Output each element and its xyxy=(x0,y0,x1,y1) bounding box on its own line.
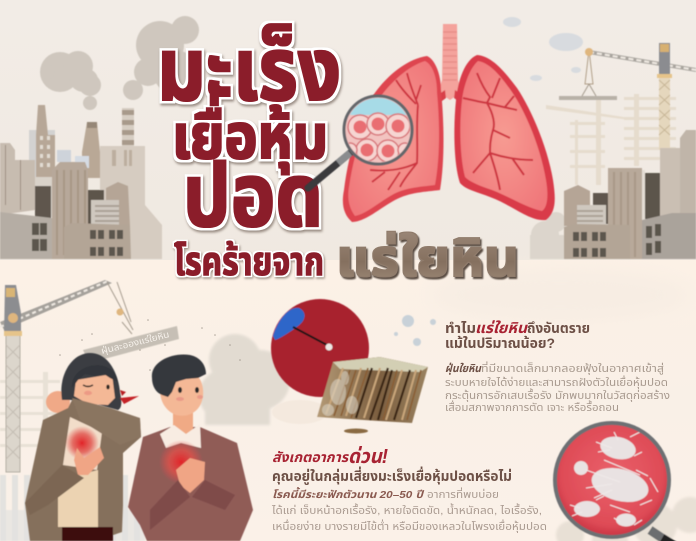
heading: watch symptoms xyxy=(272,445,512,486)
gloved hand and tweezers xyxy=(273,308,332,350)
heading accent: ด่วน! xyxy=(348,445,388,468)
heading accent: สังเกตอาการ xyxy=(272,449,350,465)
banner text: ฝุ่นละอองแร่ใยหิน xyxy=(100,329,170,356)
title line 1: มะเร็ง xyxy=(157,20,341,119)
smoke clouds left xyxy=(40,16,199,110)
title line 2: เยื่อหุ้ม xyxy=(172,93,328,174)
lens xyxy=(555,423,669,537)
hair xyxy=(152,354,206,397)
elbow arm covering mouth xyxy=(72,398,141,445)
icon: magnifier over lung tissue xyxy=(308,95,416,188)
background: faint cloud behind right text xyxy=(430,269,690,321)
crane jib xyxy=(0,280,112,330)
heading line 2: แม้ในปริมาณน้อย? xyxy=(445,335,555,351)
fist xyxy=(46,391,70,413)
background: lower cream panel xyxy=(0,260,696,541)
text block: asbestos explanation: กระตุ้นการอักเสบเรื้อรัง มักพบมากในวัสดุก่อสร้าง xyxy=(445,388,670,402)
eyes and blush xyxy=(176,387,203,401)
rock xyxy=(317,357,428,423)
left lung xyxy=(343,56,444,222)
illustration: lungs xyxy=(343,24,555,222)
left towers xyxy=(0,143,35,215)
pants xyxy=(62,527,113,541)
heading line 1: ทำไม xyxy=(445,320,476,336)
faint fence at bottom xyxy=(0,475,145,541)
text block: asbestos explanation: เสื่อมสภาพจากการตัด เจาะ หรือรื้อถอน xyxy=(445,400,619,414)
sleeve xyxy=(25,465,84,515)
text block: asbestos explanation: ที่มีขนาดเล็กมากลอยฟุ้งในอากาศเข้าสู่ xyxy=(481,361,664,375)
handle xyxy=(650,530,662,538)
text block: symptoms: อาการที่พบบ่อย xyxy=(427,487,499,501)
closed eye, open eye and blush xyxy=(83,385,110,395)
text block: symptoms: ได้แก่ เจ็บหน้าอกเรื้อรัง, หายใจติดขัด, น้ำหนักลด, ไอเรื้อรัง, xyxy=(271,503,542,517)
heading: why asbestos is dangerous xyxy=(445,320,590,351)
text block: asbestos explanation: ฝุ่นใยหิน xyxy=(445,362,482,375)
icon: magnifier over asbestos fibres in lung xyxy=(555,423,696,541)
striped central column xyxy=(52,162,88,259)
collar xyxy=(160,424,201,448)
handle xyxy=(308,153,350,188)
dust cloud behind xyxy=(556,497,696,541)
neck xyxy=(173,408,193,436)
heading line 1: แร่ใยหิน xyxy=(475,320,528,337)
dust specks beside rock xyxy=(394,315,436,346)
hair back xyxy=(61,353,121,410)
hanging banner xyxy=(83,326,179,363)
chest x-ray panel xyxy=(63,417,102,470)
dust specks near people xyxy=(59,319,241,371)
power plant block xyxy=(100,146,162,259)
face xyxy=(160,372,203,416)
text block: symptoms xyxy=(271,487,547,533)
background: lower left crane and dusty scene xyxy=(0,280,290,541)
dust cloud right of people xyxy=(199,334,290,425)
right towers xyxy=(660,148,682,218)
fringe xyxy=(72,365,118,388)
illustration: asbestos rock with tweezers xyxy=(271,299,428,434)
sleeves xyxy=(150,480,235,530)
heading accent xyxy=(272,445,388,468)
subtitle: แร่ใยหิน: แร่ใยหิน xyxy=(336,230,519,288)
crane cab xyxy=(4,285,21,335)
heading line 1 xyxy=(445,320,590,337)
tower crane xyxy=(559,43,696,150)
pale dust specks xyxy=(503,17,583,81)
text block: symptoms: เหนื่อยง่าย บางรายมีไข้ต่ำ หรือมีของเหลวในโพรงเยื่อหุ้มปอด xyxy=(272,519,547,533)
jacket xyxy=(25,400,141,541)
illustration: right construction skyline xyxy=(503,17,696,259)
hand on chest xyxy=(74,447,104,475)
fibre clusters xyxy=(570,432,658,526)
face xyxy=(74,374,115,405)
sweater xyxy=(128,427,253,541)
title: มะเร็ง เยื่อหุ้ม ปอด xyxy=(157,20,341,245)
illustration: woman coughing xyxy=(25,353,141,541)
red circle xyxy=(271,299,369,397)
subtitle: โรคร้ายจาก: โรคร้ายจาก xyxy=(174,239,324,284)
text block: asbestos explanation xyxy=(445,361,670,414)
faint scaffolding xyxy=(0,372,60,472)
hands xyxy=(176,458,205,493)
rock shadow xyxy=(272,400,328,424)
background: upper city panel xyxy=(0,0,696,260)
crane tower xyxy=(6,335,20,472)
heading line 1: ถึงอันตราย xyxy=(527,320,590,336)
chimneys xyxy=(29,105,134,180)
heading line 2: คุณอยู่ในกลุ่มเสี่ยงมะเร็งเยื่อหุ้มปอดหรือไม่ xyxy=(272,466,512,486)
right lung xyxy=(454,55,555,220)
lens xyxy=(344,96,412,164)
text block: asbestos explanation: ระบบหายใจได้ง่ายและสามารถฝังตัวในเยื่อหุ้มปอด xyxy=(445,375,668,389)
building frames pale xyxy=(546,94,676,185)
trachea xyxy=(420,24,480,116)
cough marks xyxy=(120,396,139,404)
title line 3: ปอด xyxy=(183,146,323,245)
text block: symptoms: โรคนี้มีระยะฟักตัวนาน 20–50 ปี xyxy=(272,487,424,501)
shirt xyxy=(58,470,98,527)
illustration: man holding chest xyxy=(128,354,253,541)
pale smoke by lung xyxy=(530,212,566,259)
hanging rope and hook xyxy=(107,282,133,334)
illustration: left factory skyline xyxy=(0,16,199,259)
chest glow xyxy=(159,440,203,484)
